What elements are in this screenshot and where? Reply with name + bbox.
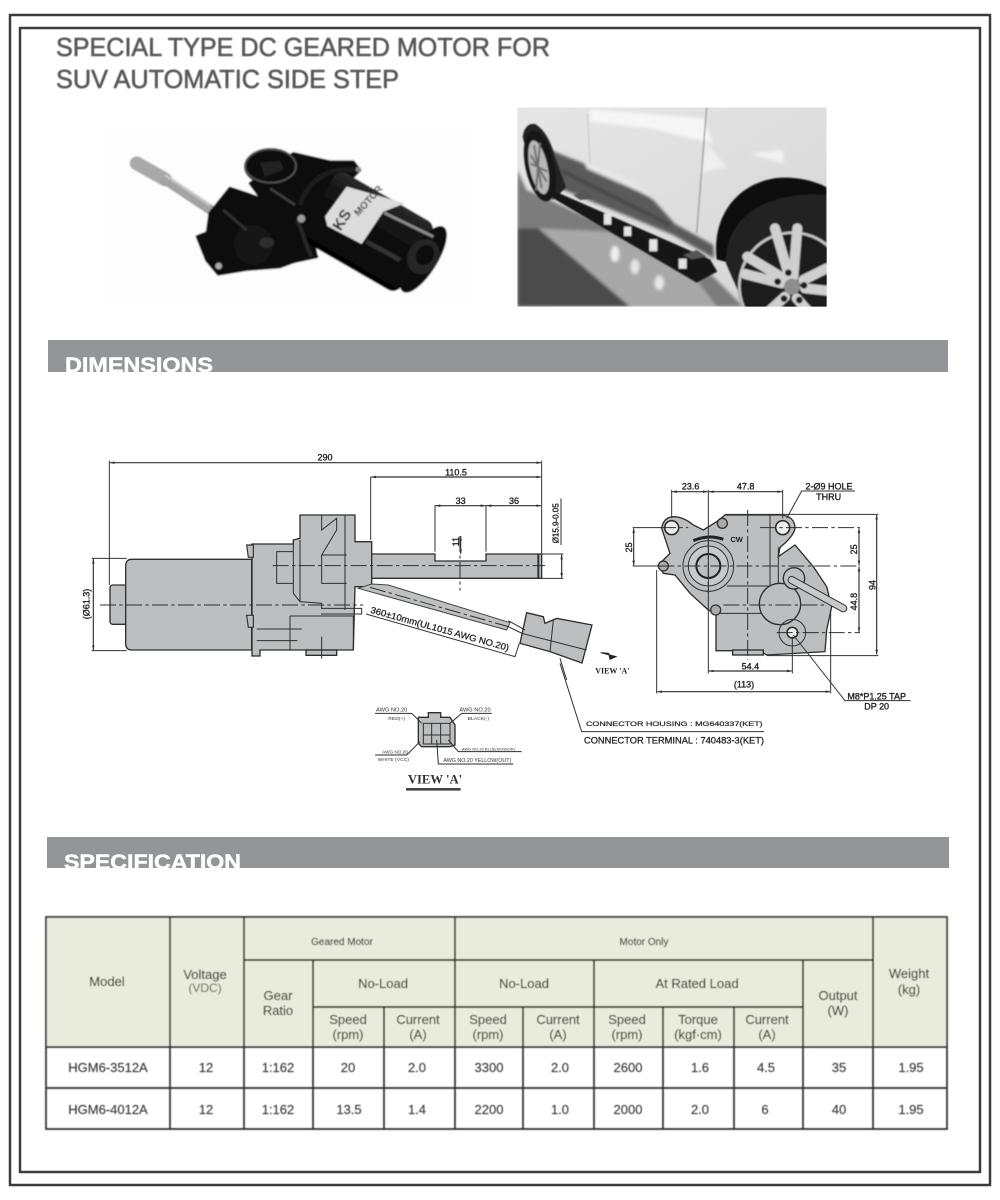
section bar: specification [47,837,949,874]
dimension labels: 36 [509,496,519,506]
table header text: Speed [329,1012,367,1027]
title: SUV AUTOMATIC SIDE STEP [56,64,399,94]
dimension labels: VIEW 'A' [595,666,629,675]
table row: HGM6-4012A: 6 [761,1102,769,1117]
table header text [89,937,929,1042]
view A connector detail: AWG NO.20 [382,749,408,754]
table header text: (rpm) [332,1027,364,1042]
table row: HGM6-4012A: 12 [199,1102,213,1117]
table header text: Current [745,1012,789,1027]
table header text: Output [818,988,858,1003]
table header text: No-Load [358,976,408,991]
table header text: (rpm) [472,1027,504,1042]
table header text: Gear [264,988,293,1003]
table header text: (A) [549,1027,567,1042]
table row: HGM6-3512A: 3300 [475,1060,503,1075]
table header text: Motor Only [620,937,668,948]
table header text: (A) [758,1027,776,1042]
table row: HGM6-3512A: 1.6 [691,1060,709,1075]
table header text: Speed [469,1012,507,1027]
section bar: dimensions: DIMENSIONS [65,354,213,377]
table row: HGM6-3512A [68,1060,924,1075]
table header text: (W) [828,1003,848,1018]
dimension labels: THRU [816,492,841,502]
cable and connector [358,584,592,680]
table row: HGM6-4012A: 13.5 [336,1102,362,1117]
view A connector detail: RED(+) [388,716,405,722]
dimension labels: CONNECTOR TERMINAL : 740483-3(KET) [584,736,764,746]
view A connector detail: VIEW 'A' [408,772,462,786]
photo: geared motor: MOTOR [352,184,385,219]
title [56,32,550,94]
table row: HGM6-4012A [68,1102,924,1117]
dimension labels [81,452,560,653]
dimension labels: 11 [451,537,461,546]
table header text: Torque [678,1012,718,1027]
table row: HGM6-3512A: 2.0 [408,1060,426,1075]
dimension labels: CW [731,535,743,544]
dimension labels: 47.8 [737,482,754,492]
title: SPECIAL TYPE DC GEARED MOTOR FOR [56,32,550,62]
photo: geared motor [103,127,473,303]
table row: HGM6-4012A: 1:162 [262,1102,294,1117]
table row: HGM6-4012A: 40 [832,1102,846,1117]
dimension labels: M8*P1.25 TAP [847,691,906,701]
view A connector detail: AWG NO.20 [459,708,491,714]
table header text: Geared Motor [311,937,374,948]
view A connector detail: BLACK(-) [468,716,489,722]
dimension lines [92,461,563,657]
table row: HGM6-4012A: 1.0 [551,1102,569,1117]
table row: HGM6-4012A: 2000 [614,1102,642,1117]
motor body side view [110,515,542,659]
table row: HGM6-4012A: 1.4 [408,1102,426,1117]
dimension labels: 290 [317,452,332,462]
dimension labels: 360±10mm(UL1015 AWG NO.20) [369,605,510,653]
table header text: (A) [409,1027,427,1042]
table row: HGM6-3512A: 1:162 [262,1060,294,1075]
section bar: specification: SPECIFICATION [64,851,241,874]
table row: HGM6-3512A: 2600 [614,1060,642,1075]
table header text: Voltage [183,967,227,982]
dimension labels: Ø15.9-0.05 [551,503,560,543]
table header text: No-Load [499,976,549,991]
gearbox front view [658,510,860,660]
table header text: Speed [608,1012,646,1027]
table header text: Weight [889,966,929,981]
photo: geared motor: KS [330,207,355,234]
table row: HGM6-3512A: 2.0 [551,1060,569,1075]
table header text: (rpm) [611,1027,643,1042]
view A connector detail [375,708,522,789]
dimension labels: 44.8 [849,593,859,610]
table row: HGM6-3512A: 20 [341,1060,355,1075]
view A connector detail: AWG NO.20 [376,708,407,714]
table row: HGM6-3512A: 35 [832,1060,846,1075]
dimension labels: DP 20 [864,702,889,712]
table row: HGM6-3512A: HGM6-3512A [68,1060,148,1075]
table header text: At Rated Load [655,976,739,991]
table row: HGM6-4012A: 2.0 [691,1102,709,1117]
table row: HGM6-4012A: HGM6-4012A [68,1102,148,1117]
table row: HGM6-3512A: 4.5 [757,1060,775,1075]
table header text: Current [536,1012,580,1027]
view A connector detail: AWG NO.20 YELLOW(OUT) [443,758,511,764]
table header text: Model [89,974,125,989]
dimension labels: 25 [624,542,634,552]
table row: HGM6-3512A: 1.95 [898,1060,924,1075]
table row: HGM6-4012A: 1.95 [898,1102,924,1117]
dimension labels: 23.6 [682,482,699,492]
front view drawing [560,482,911,746]
dimension labels [584,482,906,746]
table row: HGM6-3512A: 12 [199,1060,213,1075]
dimension labels: 94 [867,580,877,590]
table header text: (kgf·cm) [674,1027,722,1042]
dimension labels: 33 [456,496,466,506]
side view drawing [81,452,592,680]
centre lines [100,536,545,605]
dimension labels: 2-Ø9 HOLE [806,482,852,492]
table row: HGM6-4012A: 2200 [475,1102,503,1117]
table header text: (VDC) [188,981,222,995]
photo: SUV side step [517,107,848,341]
dimension lines [560,490,911,732]
table header text: (kg) [898,982,920,997]
table header background [46,917,947,1047]
dimension labels: (113) [734,679,754,689]
view A connector detail: WHITE (VCC) [378,757,409,763]
section bar: dimensions [48,340,948,377]
table header text: Ratio [263,1003,293,1018]
dimension labels: 110.5 [445,468,467,478]
view A connector detail: AWG NO.20 BLUE(SENSOR) [462,747,515,752]
table grid [46,917,947,1129]
dimension labels: 25 [849,544,859,554]
dimension labels: CONNECTOR HOUSING : MG640337(KET) [586,721,763,728]
dimension labels: (Ø61.3) [81,589,91,619]
table header text: Current [396,1012,440,1027]
dimension labels: 54.4 [742,662,759,672]
specification table [46,917,947,1129]
